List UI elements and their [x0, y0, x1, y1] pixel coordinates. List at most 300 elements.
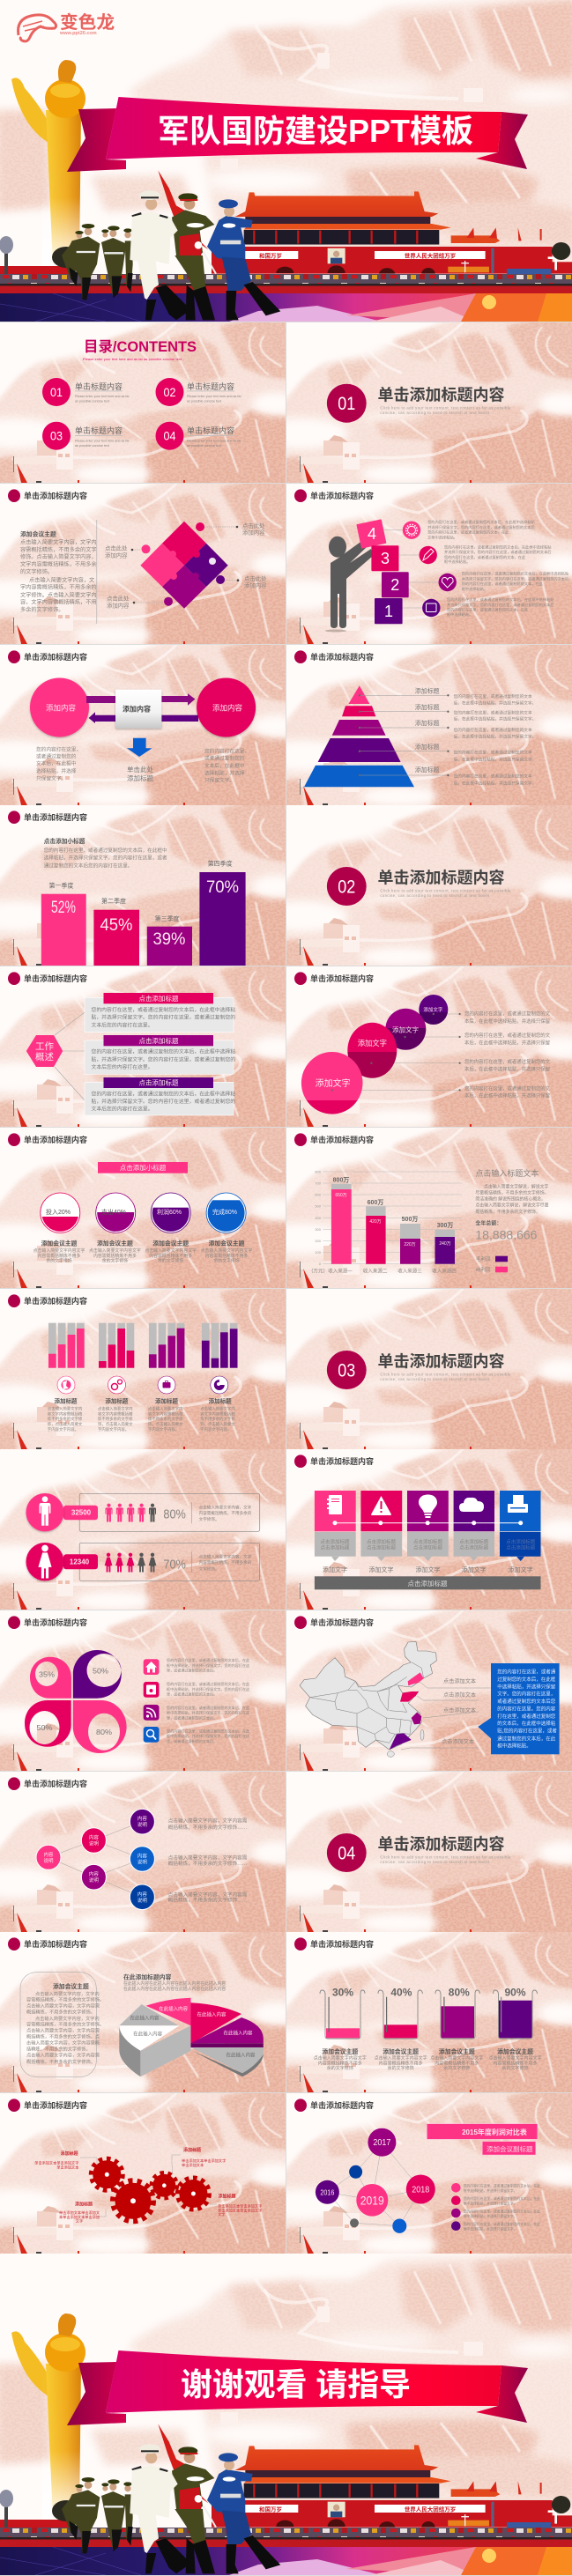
chart text: 简洁准确的 解说所围绕的核心概念。 — [475, 1196, 546, 1202]
circle 3: 添加文字 — [392, 1025, 419, 1033]
ratio 4: 完成80% — [212, 1208, 237, 1216]
header: 单击添加标题内容 — [24, 973, 87, 983]
left text: 添加会议主题 — [20, 530, 56, 537]
gray callouts: 点击添加标题 — [413, 1543, 442, 1551]
section title: 单击添加标题内容 — [377, 869, 504, 886]
circle text: 本后，在此框中选择粘贴，并选择只保留 — [464, 1040, 550, 1047]
women row: 点击输入简要文字内容，文字 — [199, 1553, 252, 1559]
block descriptions: 框中选择粘贴。 — [447, 611, 472, 618]
block descriptions: 您的内容打在这里，或者通过复制您的文本，在此 — [427, 529, 509, 536]
section number — [327, 384, 367, 423]
gray callouts: 点击添加标题 — [320, 1543, 350, 1551]
petal descriptions: 框中选择粘贴，并选择只保留文字。您的内容打在这 — [167, 1686, 249, 1691]
box 1: 您的内容打在这里，或者通过复制您的文本后，在此框中选择粘 — [92, 1006, 235, 1013]
legend: 毛利润 — [476, 1255, 491, 1262]
pie heading — [123, 1973, 226, 1992]
section number — [327, 867, 367, 906]
section number: 04 — [338, 1843, 356, 1863]
pie heading: 在此插入内容在此插入内容在此插入内容在此插入内容 — [123, 1980, 226, 1987]
gray callouts: 点击添加标题 — [320, 1538, 350, 1545]
item 03: as possible concise text — [75, 444, 109, 448]
header — [294, 1616, 374, 1629]
beaker captions: 添加会议主题 — [439, 2047, 475, 2055]
callout labels: 点击此处 — [105, 544, 128, 551]
gray callouts: 点击添加标题 — [367, 1543, 396, 1551]
petal descriptions: 里，或者通过复制您的文本后。 — [167, 1691, 217, 1697]
pyramid labels — [415, 687, 440, 774]
intro text: 您的内容打在这里，或者通过复制您的文本后，在此框中 — [44, 847, 167, 854]
item 02: Please enter your text here and as far — [187, 395, 241, 398]
pyramid text: 后，在此框中选择粘贴，并选择只保留文字。 — [454, 734, 536, 740]
3D pie chart: 在此插入内容 — [159, 2005, 189, 2012]
item 02 — [155, 378, 241, 406]
gear label 1: 单击添加文本 — [56, 2164, 79, 2171]
section number — [327, 1351, 367, 1389]
gray callouts: 点击添加标题 — [459, 1538, 489, 1545]
box 1 — [85, 993, 235, 1033]
pyramid text: 您的内容打在这里，或者通过复制您的文本 — [454, 773, 532, 779]
outlined text card: 点击输入简要文字内容，文字内容需 — [26, 2052, 100, 2059]
blue callout: 或者通过复制您的文本后您 — [497, 1698, 556, 1705]
stacked bar chart: 200 — [315, 1239, 322, 1243]
node 2 — [81, 1828, 106, 1853]
blue callout — [478, 1663, 560, 1754]
column labels: 添加文字 — [323, 1566, 347, 1573]
header: 单击添加标题内容 — [24, 1296, 87, 1306]
gear label 2 — [182, 2147, 226, 2168]
bar chart: 第四季度 — [208, 860, 233, 867]
header: 单击添加标题内容 — [310, 652, 374, 662]
group captions: 字内容文字内容。 — [148, 1426, 179, 1432]
group captions: 添加标题 — [209, 1396, 232, 1404]
group captions: 容文字内容需概括精 — [98, 1411, 133, 1417]
item 04 — [155, 422, 241, 450]
stacked bar chart: 400 — [315, 1216, 322, 1220]
node 1: 说明 — [43, 1857, 54, 1864]
year 2017 — [368, 2128, 396, 2157]
gear label 3: 添加标题 — [218, 2194, 236, 2199]
stacked bar chart: 600万 — [368, 1199, 383, 1206]
arrow: blue down — [127, 738, 152, 757]
outlined text card: 概括精炼，不用多余的文字修饰。 — [26, 2009, 95, 2016]
ratio captions: 点击输入简要文字内容文字 — [89, 1247, 141, 1254]
gear label 3: 单击添加文本单击添加文字 — [218, 2208, 262, 2213]
group captions: 容文字内容需概括精 — [200, 1411, 235, 1417]
center box: 添加内容 — [123, 705, 151, 714]
group captions: 点击输入简要文字内 — [48, 1406, 82, 1411]
year 2019: 2019 — [360, 2194, 384, 2208]
pyramid text — [454, 693, 536, 786]
puzzle graphic — [140, 522, 228, 609]
right text: 您的内容打在这里， — [204, 747, 249, 754]
outlined text card: 点击输入简要文字内容，文字内容需 — [26, 2002, 100, 2010]
beaker captions: 点击输入简要文字内容文字 — [430, 2054, 483, 2062]
block descriptions: 并选择只保留文字。您的内容打在这里，或者通过复制您的文本后 — [447, 602, 553, 608]
right circle — [197, 678, 256, 737]
column labels — [323, 1566, 533, 1573]
petal 35% — [30, 1657, 71, 1699]
section subtitle: Click here to add your text content, text content as far as possible — [380, 1855, 511, 1859]
group captions: 添加标题 — [55, 1396, 78, 1404]
group captions: 炼不用多余的文字修 — [48, 1416, 83, 1422]
chart text: 尽量概括精炼，不用多余的文字修饰， — [475, 1189, 549, 1196]
left text: 点击输入简要文字内容，文字内 — [20, 539, 97, 546]
ratio 4 — [206, 1193, 246, 1233]
node descriptions: 点击输入简要文字内容，文字内容需 — [168, 1817, 248, 1825]
node 3: 说明 — [89, 1876, 99, 1884]
beaker captions: 点击输入简要文字内容文字 — [375, 2054, 427, 2062]
circle text: 您的内容打在这里，或者通过复制您的文 — [464, 1058, 551, 1065]
block descriptions: 您的内容打在这里，或者通过复制您的文本后，在此框中选择粘贴 — [447, 596, 553, 603]
blue callout: 通过复制您的文本后，在此 — [497, 1735, 556, 1742]
beaker 40% — [378, 1986, 423, 2039]
blue callout: 的内容打在这里。您的内容 — [497, 1706, 556, 1713]
header: 单击添加标题内容 — [24, 491, 87, 500]
left text: 修饰。点击输入简要文字内容， — [20, 553, 97, 560]
icon: chart ring — [211, 1376, 228, 1394]
panel: yearly circles slide — [286, 2093, 572, 2254]
callout labels: 添加内容 — [242, 529, 265, 536]
ribbon banner — [67, 2350, 528, 2425]
circle 2 — [347, 1021, 397, 1079]
ratio captions — [33, 1239, 252, 1263]
icon: cloud — [459, 1498, 484, 1512]
pyramid text: 您的内容打在这里，或者通过复制您的文本 — [454, 727, 532, 733]
gear label 1 — [34, 2150, 79, 2171]
box 2: 您的内容打在这里，或者通过复制您的文本后，在此框中选择粘 — [92, 1048, 235, 1055]
header — [8, 489, 87, 502]
panel: stacked column slide — [286, 1128, 572, 1288]
gray callouts: 点击添加标题 — [506, 1543, 536, 1551]
beaker 80% — [435, 1986, 479, 2039]
men row — [26, 1493, 260, 1531]
left text: 多余的文字修饰。 — [20, 606, 63, 613]
icon: home — [144, 1659, 159, 1675]
pyramid labels: 添加标题 — [415, 743, 440, 751]
stacked bar chart: 800万 — [333, 1177, 349, 1184]
leader lines — [359, 694, 449, 776]
intro text: 通过复制您的文本后您的内容打在这里。 — [44, 862, 132, 869]
header — [8, 1777, 87, 1790]
ratio 3 — [151, 1193, 190, 1234]
node 4 — [130, 1809, 154, 1834]
panel: section 04 — [286, 1772, 572, 1932]
node descriptions: 点击输入简要文字内容，文字内容需 — [168, 1891, 248, 1899]
bar group 3 — [149, 1323, 184, 1368]
women row: 12340 — [70, 1558, 90, 1566]
gear label 4: 文字 — [76, 2218, 83, 2224]
ratio captions: 内容需概括精炼不用多 — [149, 1253, 192, 1259]
circle 1: 添加文字 — [316, 1077, 351, 1089]
beaker 30% — [320, 1986, 365, 2039]
ratio captions: 余的文字修饰 — [46, 1258, 72, 1263]
block descriptions: 文框中选择粘贴。 — [427, 534, 457, 541]
number blocks: 4 — [368, 525, 376, 543]
ratio 2 — [96, 1193, 136, 1234]
group captions: 点击输入简要文字内 — [200, 1406, 235, 1411]
beaker captions: 余的文字修饰 — [388, 2065, 414, 2071]
beaker captions: 内容需概括精炼不用多 — [435, 2060, 479, 2067]
header: 单击添加标题内容 — [310, 1456, 374, 1466]
header: 单击添加标题内容 — [24, 1779, 87, 1788]
section number: 01 — [338, 394, 355, 414]
icon: briefcase — [158, 1376, 175, 1394]
icon: disk — [144, 1682, 159, 1698]
right text: 只保留文字。 — [204, 777, 234, 784]
bar group 1 — [48, 1323, 85, 1368]
bar chart: 39% — [153, 930, 186, 949]
right text: 文本后，在此框中 — [204, 762, 245, 769]
node 5 — [130, 1847, 154, 1871]
title bar — [427, 2124, 538, 2139]
circle text: 您的内容打在这里，或者通过复制您的文 — [464, 1010, 551, 1018]
ratio captions: 余的文字修饰 — [158, 1258, 183, 1263]
center box — [115, 690, 161, 729]
panel: overlapping circles slide — [286, 966, 572, 1127]
beaker captions: 添加会议主题 — [383, 2047, 419, 2055]
ratio captions: 内容需概括精炼不用多 — [38, 1253, 81, 1259]
women row: 文字修饰。 — [199, 1566, 219, 1572]
year 2019 — [356, 2184, 388, 2217]
gear label 4: 添加标题 — [75, 2201, 93, 2208]
left text: 文字内容需概括精炼，不用多余 — [20, 560, 97, 567]
gear label 2: 单击添加文本 — [182, 2162, 204, 2168]
item 01: 单击标题内容 — [75, 381, 123, 391]
pyramid text: 您的内容打在这里，或者通过复制您的文本 — [454, 693, 532, 700]
contents subtitle: Please enter your text here and as far as possible concise text — [83, 358, 182, 361]
node 3 — [81, 1864, 106, 1890]
blue callout: 中选择粘贴，并选择只保留 — [497, 1683, 556, 1690]
section subtitle: concise, can according to need to stretch at text boxes — [380, 411, 489, 415]
hexagon — [26, 1035, 63, 1067]
circle text: 本后，在此框中选择粘贴，并选择只保留 — [464, 1065, 550, 1072]
header: 单击添加标题内容 — [310, 2100, 374, 2110]
logo: 变色龙 — [60, 11, 115, 33]
ratio captions: 点击输入简要文字内容文字 — [33, 1247, 85, 1254]
map labels: 点击添加文本 — [443, 1691, 476, 1699]
hexagon: 概述 — [35, 1051, 54, 1062]
item 03: 03 — [50, 429, 63, 443]
wall banners: 世界人民大团结万岁 — [405, 2506, 456, 2513]
year 2018: 2018 — [412, 2186, 430, 2195]
year legend: 框中选择粘贴，并选择只保留文字。 — [464, 2202, 516, 2206]
left circle — [30, 678, 89, 737]
header — [8, 650, 87, 663]
node descriptions: 概括精炼，不用多余的文字修饰…… — [168, 1897, 247, 1904]
stacked bar chart: 收入来源三 — [397, 1267, 422, 1274]
bar chart: 52% — [51, 899, 76, 917]
left text: 选择粘贴，并选择 — [36, 767, 77, 774]
section subtitle: concise, can according to need to stretch at text boxes — [380, 1377, 489, 1381]
item 02: 02 — [164, 385, 176, 399]
bar chart — [41, 860, 246, 966]
men row: 80% — [163, 1508, 186, 1522]
block descriptions: 您的内容打在这里，或者通过复制您的文本，在此 — [462, 581, 544, 587]
wall banners: 和国万岁 — [259, 2506, 282, 2513]
left text: 文字修饰。点击输入简要文字内 — [20, 591, 97, 598]
left text — [20, 530, 97, 613]
ratio captions: 添加会议主题 — [152, 1239, 189, 1247]
icon: gears — [108, 1376, 125, 1394]
header: 单击添加标题内容 — [24, 1135, 87, 1144]
item 04: as possible concise text — [187, 444, 221, 448]
circle text: 您的内容打在这里，或者通过复制您的文 — [464, 1032, 551, 1039]
outlined text card — [20, 1973, 104, 2076]
panel: timeline columns slide — [286, 1449, 572, 1610]
intro text: 选择粘贴，并选择只保留文字。您的内容打在这里，或者 — [44, 854, 167, 861]
stacked bar chart: 650万 — [335, 1193, 347, 1198]
group captions: 点击输入简要文字内 — [148, 1406, 183, 1411]
bar chart: 第三季度 — [155, 914, 180, 922]
icon: gear — [403, 522, 420, 539]
blue callout: 过复制您的文本后，在此框 — [497, 1676, 556, 1683]
blue callout: 打在这里，或者通过复制您 — [497, 1713, 556, 1720]
3D pie chart — [119, 1998, 264, 2076]
petal 80%: 80% — [96, 1728, 112, 1736]
stacked bar chart: 收入来源一 — [328, 1267, 353, 1274]
men row: 点击输入简要文字内容，文字 — [199, 1504, 252, 1510]
gear label 3: 文字 — [218, 2211, 225, 2217]
outlined text card: 点击输入简要文字内容，文字内 — [35, 2015, 100, 2022]
section subtitle: Click here to add your text content, text content as far as possible — [380, 888, 511, 893]
block descriptions: 并选择只保留文字。您的内容打在这里，或者通过复制您的文本后 — [444, 549, 551, 555]
panel: section 03 — [286, 1289, 572, 1449]
ratio captions: 余的文字修饰 — [213, 1258, 240, 1263]
item 03: Please enter your text here and as far — [75, 439, 130, 442]
outlined text card: 容需概括精炼，不用多余的文字修饰。 — [26, 2021, 104, 2028]
circle 4: 添加文字 — [423, 1006, 443, 1013]
year 2018 — [406, 2174, 435, 2204]
item 02: as possible concise text — [187, 400, 221, 403]
group captions: 饰，点击输入简要文 — [98, 1421, 133, 1427]
block descriptions: 您的内容打在这里，或者通过复制您的文本后，在此框中选择粘贴 — [444, 544, 551, 550]
box 2: 文本后您的内容打在这里。 — [92, 1063, 153, 1070]
block descriptions: 您的内容打在这里，或者通过复制您的文本后，在此框中选择粘贴 — [427, 519, 535, 525]
icon: globe — [57, 1376, 75, 1394]
circle 4 — [419, 995, 448, 1025]
gear label 2: 添加标题 — [183, 2147, 201, 2153]
beaker captions: 点击输入简要文字内容文字 — [314, 2054, 367, 2062]
ratio captions: 余的文字修饰 — [102, 1258, 128, 1263]
left text: 点击输入简要文字内容，文 — [29, 576, 94, 583]
block descriptions: 您的内容打在这里，或者通过复制您的文本后，在此框中选择粘贴 — [462, 571, 568, 576]
callout labels: 添加内容 — [244, 581, 267, 588]
stacked bar chart: 600 — [315, 1193, 322, 1196]
header — [8, 2099, 87, 2112]
group captions: 添加标题 — [155, 1396, 178, 1404]
group captions: 容文字内容需概括精 — [48, 1411, 83, 1417]
year 2016: 2016 — [320, 2188, 335, 2196]
wall banners: 和国万岁 — [259, 252, 282, 259]
node 4: 说明 — [137, 1821, 147, 1828]
year 2016 — [316, 2180, 339, 2204]
gear label 1: 添加标题 — [61, 2150, 78, 2157]
callout labels: 添加内容 — [105, 551, 128, 559]
box 3: 贴，并选择只保留文字。您的内容打在这里，或者通过复制您的 — [92, 1098, 235, 1105]
beaker 40%: 40% — [390, 1986, 412, 1998]
callout labels: 点击此处 — [107, 594, 130, 603]
down label: 单击此处 — [127, 765, 153, 774]
node 3: 内容 — [89, 1870, 99, 1877]
header — [8, 1937, 87, 1951]
pyramid text: 后，在此框中选择粘贴，并选择只保留文字。 — [454, 780, 536, 786]
3D pie chart: 在此插入内容 — [133, 2030, 163, 2037]
year 2017: 2017 — [373, 2138, 391, 2148]
node 6 — [130, 1884, 154, 1910]
header — [8, 1294, 87, 1307]
men row: 内容需概括精炼，不用多余的 — [199, 1510, 252, 1516]
panel: closing slide — [0, 2254, 572, 2575]
petal descriptions — [167, 1657, 249, 1743]
box 1: 点击添加标题 — [139, 994, 179, 1003]
bullets — [331, 1013, 461, 1091]
title bar: 2015年度利润对比表 — [462, 2128, 527, 2136]
beaker captions: 添加会议主题 — [497, 2047, 533, 2055]
wall banners: 世界人民大团结万岁 — [405, 252, 456, 259]
stacked bar chart: 220万 — [404, 1242, 416, 1247]
women row — [26, 1543, 260, 1580]
column labels: 添加文字 — [509, 1566, 533, 1573]
map labels: 点击添加文本 — [442, 1738, 474, 1745]
chart text: 概括精炼，不用多余的文字修饰。 — [475, 1209, 540, 1215]
node descriptions: 概括精炼，不用多余的文字修饰…… — [168, 1860, 247, 1867]
beaker captions: 内容需概括精炼不用多 — [493, 2060, 538, 2067]
petal descriptions: 框中选择粘贴，并选择只保留文字。您的内容打在这 — [167, 1709, 249, 1714]
petal descriptions: 里，或者通过复制您的文本后。 — [167, 1738, 217, 1743]
stacked bar chart: （万元） — [308, 1268, 328, 1274]
panel: people ratio slide — [0, 1449, 286, 1610]
panel: work overview slide — [0, 966, 286, 1127]
circle text: 本后，在此框中选择粘贴，并选择只保留 — [464, 1092, 550, 1099]
box 2: 点击添加标题 — [139, 1036, 179, 1045]
subtitle bar: 点击添加小标题 — [120, 1163, 167, 1172]
node 2: 内容 — [89, 1834, 99, 1841]
petal descriptions: 里，或者通过复制您的文本后。 — [167, 1667, 217, 1672]
petal 50% top — [73, 1650, 122, 1699]
legend — [476, 1255, 508, 1273]
beaker captions: 内容需概括精炼不用多 — [318, 2060, 362, 2067]
panel: section 01 — [286, 322, 572, 483]
panel: section 02 — [286, 805, 572, 966]
block descriptions: 并选择只保留文字。您的内容打在这里，或者通过复制您的文本后 — [427, 524, 535, 530]
3D pie chart: 在此插入内容 — [226, 2052, 256, 2059]
gray callouts: 点击添加标题 — [506, 1538, 536, 1545]
outlined text card: 概括精炼，不用多余的文字修饰。点 — [26, 2032, 100, 2039]
stacked bar chart — [308, 1170, 462, 1274]
outlined text card: 容需概括精炼，不用多余的文字修饰。 — [26, 1996, 104, 2003]
bar chart: 第二季度 — [101, 897, 126, 905]
gray callouts: 点击添加标题 — [413, 1538, 442, 1545]
node 6: 内容 — [137, 1891, 147, 1898]
outlined text card: 点击输入简要文字内容，文字内 — [35, 1990, 100, 1997]
box 2: 贴，并选择只保留文字。您的内容打在这里，或者通过复制您的 — [92, 1055, 235, 1062]
3D pie chart: 在此插入内容 — [197, 2011, 227, 2018]
stacked bar chart: 收入来源四 — [432, 1267, 457, 1274]
beaker 80%: 80% — [449, 1986, 470, 1998]
pyramid text: 后，在此框中选择粘贴，并选择只保留文字。 — [454, 756, 536, 762]
ratio captions: 添加会议主题 — [41, 1239, 78, 1247]
bar chart: 45% — [100, 916, 133, 935]
item 04: 04 — [164, 429, 176, 443]
arrow: to right — [86, 696, 115, 703]
petal descriptions: 您的内容打在这里，或者通过复制您的文本后，在此 — [167, 1657, 249, 1662]
icon: search — [144, 1727, 159, 1743]
section title: 单击添加标题内容 — [377, 1834, 504, 1854]
header — [294, 1937, 374, 1951]
beaker captions: 添加会议主题 — [322, 2047, 358, 2055]
beaker captions — [314, 2047, 542, 2071]
group captions: 添加标题 — [105, 1396, 129, 1404]
